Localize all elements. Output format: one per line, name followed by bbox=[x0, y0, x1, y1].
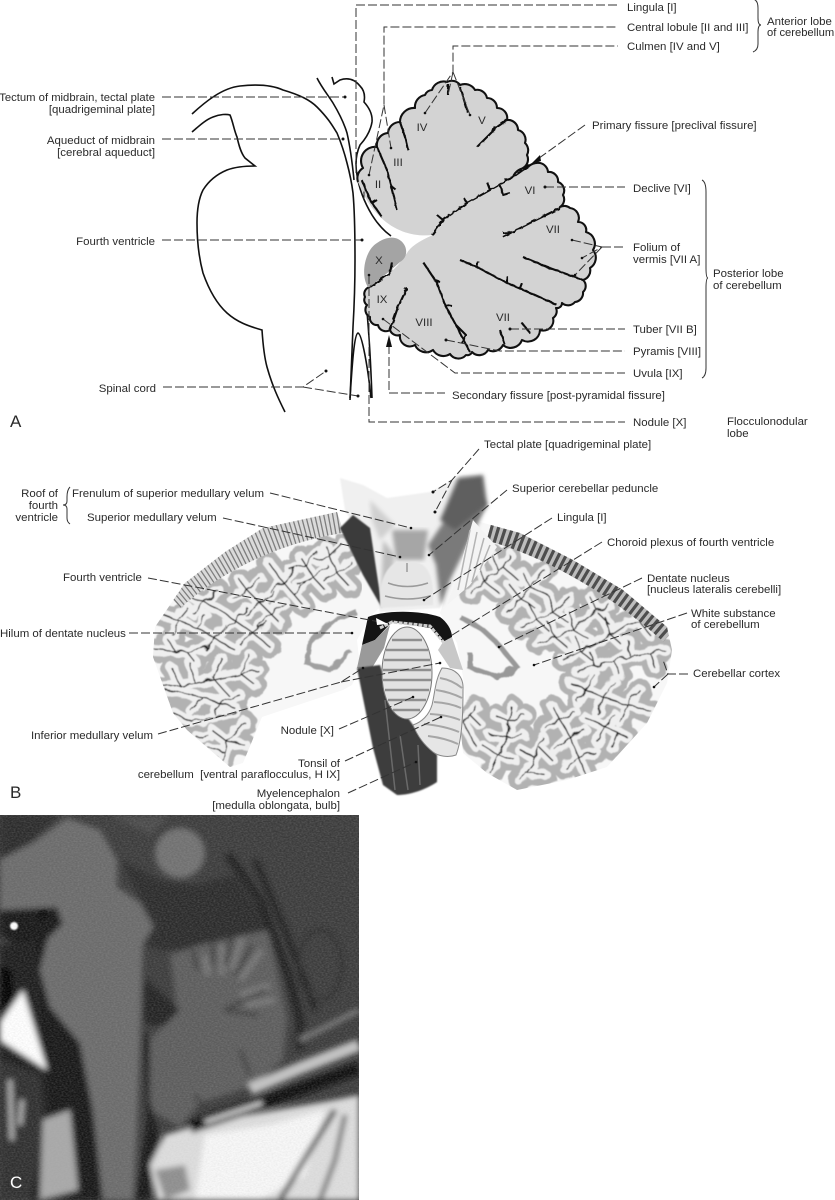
lobule numerals: I bbox=[362, 190, 366, 202]
label: Fourth ventricle bbox=[63, 572, 388, 625]
panel B: dorsal view of cerebellum section bbox=[0, 439, 781, 812]
label: Frenulum of superior medullary velum bbox=[72, 488, 412, 529]
panel C: sagittal MRI scan bbox=[0, 815, 359, 1200]
label: Flocculonodular lobe: Flocculonodular bbox=[727, 416, 808, 428]
label: Primary fissure bbox=[530, 120, 757, 165]
label: Lingula: Lingula [I] bbox=[627, 2, 677, 14]
label: Fourth ventricle: Fourth ventricle bbox=[63, 572, 142, 584]
posterior lobe of cerebellum bbox=[364, 163, 596, 359]
label: Aqueduct of midbrain: [cerebral aqueduct] bbox=[57, 147, 155, 159]
label: Nodule bbox=[368, 274, 686, 429]
label: Tuber: Tuber [VII B] bbox=[633, 324, 697, 336]
label: Spinal cord bbox=[99, 370, 360, 398]
label: Tectal plate: Tectal plate [quadrigeminal plate] bbox=[484, 439, 651, 451]
label: Choroid plexus bbox=[448, 537, 774, 638]
dentate nuclei bbox=[307, 612, 517, 677]
label: Nodule: Nodule [X] bbox=[633, 417, 686, 429]
lobule numerals: VI bbox=[525, 185, 535, 197]
label: Roof of fourth ventricle with brace: ventricle bbox=[15, 512, 58, 524]
label: Uvula bbox=[382, 318, 683, 380]
label: Choroid plexus: Choroid plexus of fourth ventricle bbox=[607, 537, 774, 549]
label: Primary fissure: Primary fissure [preclival fissure] bbox=[592, 120, 757, 132]
lobule numerals: II bbox=[375, 179, 381, 191]
lobule numerals: III bbox=[393, 157, 403, 169]
label: Uvula: Uvula [IX] bbox=[633, 368, 683, 380]
label: White substance: White substance bbox=[691, 608, 776, 620]
label: Aqueduct of midbrain: Aqueduct of midbrain bbox=[47, 135, 155, 147]
label: Frenulum of superior medullary velum: Frenulum of superior medullary velum bbox=[72, 488, 264, 500]
label: Roof of fourth ventricle with brace: Roof of bbox=[21, 488, 59, 500]
label: Dentate nucleus: [nucleus lateralis cerebelli] bbox=[647, 584, 781, 596]
panel A: sagittal diagram of the cerebellum bbox=[0, 0, 834, 440]
label: Tonsil of cerebellum bbox=[138, 716, 442, 781]
label: Nodule: Nodule [X] bbox=[281, 725, 334, 737]
label: Tectum of midbrain: Tectum of midbrain, tectal plate bbox=[0, 92, 155, 104]
label: Hilum of dentate nucleus: Hilum of dentate nucleus bbox=[0, 628, 126, 640]
label: Pyramis: Pyramis [VIII] bbox=[633, 346, 701, 358]
label: Superior medullary velum bbox=[87, 512, 401, 558]
label: Myelencephalon: Myelencephalon bbox=[257, 788, 340, 800]
right cerebellar hemisphere bbox=[440, 520, 672, 790]
label: Central lobule bbox=[368, 22, 748, 176]
label: Folium of vermis: Folium of bbox=[633, 242, 681, 254]
label: Fourth ventricle bbox=[76, 236, 364, 248]
anterior lobe of cerebellum bbox=[357, 81, 528, 235]
cerebellar tonsil bbox=[413, 668, 463, 756]
label: Lingula: Lingula [I] bbox=[557, 512, 607, 524]
lobule numerals: X bbox=[375, 255, 383, 267]
label: Culmen: Culmen [IV and V] bbox=[627, 41, 720, 53]
brace: anterior lobe bbox=[753, 0, 834, 52]
fourth ventricle cavity bbox=[357, 612, 463, 670]
label: Folium of vermis: vermis [VII A] bbox=[633, 254, 700, 266]
brainstem outline drawing bbox=[192, 77, 391, 412]
nodule bbox=[382, 627, 432, 719]
brace: anterior lobe: Anterior lobe bbox=[767, 16, 832, 28]
label: Declive: Declive [VI] bbox=[633, 183, 691, 195]
label: Declive bbox=[544, 183, 691, 195]
label: Tectum of midbrain: [quadrigeminal plate] bbox=[49, 104, 155, 116]
label: Dentate nucleus bbox=[498, 573, 781, 648]
label: Flocculonodular lobe: lobe bbox=[727, 428, 749, 440]
lobule numerals: IV bbox=[417, 122, 428, 134]
label: Cerebellar cortex: Cerebellar cortex bbox=[693, 668, 780, 680]
label: Lingula bbox=[356, 2, 677, 173]
panel letter B: B bbox=[10, 783, 21, 802]
label: Tonsil of cerebellum: Tonsil of bbox=[298, 758, 341, 770]
brace: posterior lobe: of cerebellum bbox=[713, 280, 782, 292]
label: Folium of vermis bbox=[571, 239, 700, 276]
label: Fourth ventricle: Fourth ventricle bbox=[76, 236, 155, 248]
label: Central lobule: Central lobule [II and III] bbox=[627, 22, 748, 34]
brace: posterior lobe bbox=[702, 180, 784, 378]
label: Superior cerebellar peduncle: Superior cerebellar peduncle bbox=[512, 483, 658, 495]
label: Myelencephalon bbox=[212, 761, 417, 812]
label: Secondary fissure: Secondary fissure [post-pyramidal fissure] bbox=[452, 390, 665, 402]
label: Inferior medullary velum bbox=[31, 662, 441, 742]
lobule numerals: V bbox=[478, 115, 486, 127]
lobule numerals: IX bbox=[377, 294, 388, 306]
lobule numerals: VIII bbox=[415, 317, 433, 329]
label: Inferior medullary velum: Inferior medullary velum bbox=[31, 730, 153, 742]
left cerebellar hemisphere bbox=[153, 512, 380, 767]
brace: posterior lobe: Posterior lobe bbox=[713, 268, 784, 280]
label: Myelencephalon: [medulla oblongata, bulb] bbox=[212, 800, 340, 812]
label: Superior cerebellar peduncle bbox=[428, 483, 658, 556]
label: Secondary fissure bbox=[386, 335, 665, 402]
label: Tonsil of cerebellum: cerebellum [ventral paraflocculus, H IX] bbox=[138, 769, 340, 781]
label: Roof of fourth ventricle with brace: fourth bbox=[29, 500, 58, 512]
label: Nodule bbox=[281, 696, 414, 737]
fissures bbox=[362, 84, 583, 352]
label: White substance: of cerebellum bbox=[691, 619, 760, 631]
label: White substance bbox=[533, 608, 776, 666]
panel letter A: A bbox=[10, 412, 22, 431]
label: Tuber bbox=[508, 324, 697, 336]
label: Dentate nucleus: Dentate nucleus bbox=[647, 573, 730, 585]
label: Superior medullary velum: Superior medullary velum bbox=[87, 512, 217, 524]
label: Tectal plate bbox=[432, 439, 651, 514]
label: Culmen bbox=[424, 41, 720, 116]
nodule lobule X bbox=[364, 238, 406, 287]
label: Aqueduct of midbrain bbox=[47, 135, 344, 159]
brainstem and colliculi bbox=[340, 475, 497, 612]
label: Spinal cord: Spinal cord bbox=[99, 383, 156, 395]
label: Pyramis bbox=[444, 338, 701, 358]
lobule numerals: VII bbox=[546, 224, 560, 236]
lobule numerals: VII bbox=[496, 312, 510, 324]
label: Tectum of midbrain bbox=[0, 92, 346, 116]
label: Roof of fourth ventricle with brace bbox=[15, 487, 70, 524]
medulla oblongata bbox=[357, 665, 437, 795]
lobule numerals bbox=[362, 115, 560, 329]
label: Flocculonodular lobe bbox=[727, 416, 808, 440]
brace: anterior lobe: of cerebellum bbox=[767, 27, 834, 39]
label: Cerebellar cortex bbox=[653, 660, 780, 688]
panel letter C: C bbox=[10, 1173, 22, 1192]
label: Lingula bbox=[423, 512, 607, 601]
